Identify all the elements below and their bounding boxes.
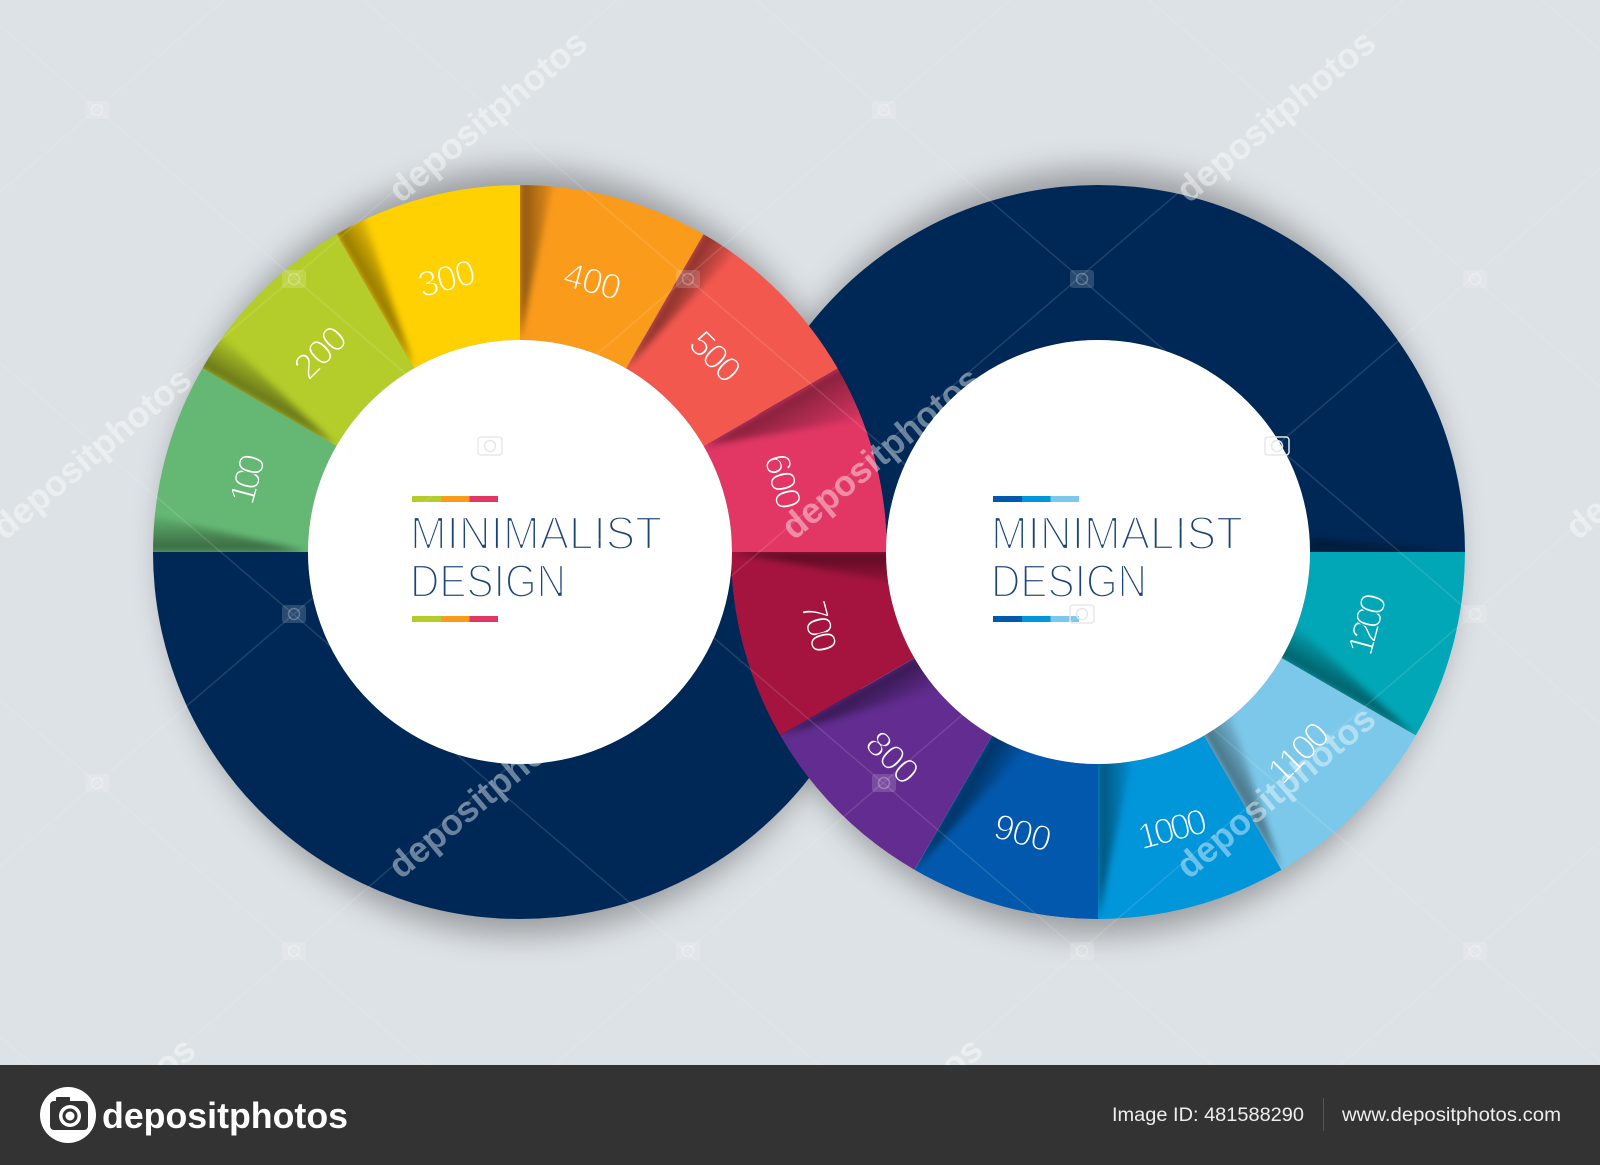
right ring numbers: 800 (858, 722, 928, 792)
segment 1100 (1204, 658, 1416, 870)
right ring numbers: 1000 (1133, 800, 1211, 858)
segment 700 (731, 552, 914, 736)
left ring navy half (153, 552, 887, 919)
left centre label: MINIMALIST (410, 507, 662, 559)
website: www.depositphotos.com (1341, 1104, 1561, 1126)
right centre label: MINIMALIST (991, 507, 1243, 559)
right ring navy half (731, 185, 1465, 552)
right ring numbers: 1200 (1339, 589, 1395, 659)
left ring numbers: 300 (413, 251, 480, 305)
segment 900 (914, 736, 1098, 919)
watermark layer: depositphotos (773, 358, 988, 547)
icon: depositphotos camera logo (40, 1087, 96, 1143)
left centre label: DESIGN (410, 555, 566, 607)
left ring numbers (221, 251, 810, 514)
right ring numbers: 1100 (1259, 713, 1338, 792)
left inner white circle (308, 340, 732, 764)
watermark layer: depositphotos (380, 697, 595, 886)
segment 600 (704, 368, 886, 552)
watermark layer: depositphotos (380, 21, 595, 210)
right centre label (991, 496, 1243, 622)
left ring numbers: 200 (285, 317, 355, 387)
logo wordmark: depositphotos (102, 1095, 348, 1136)
panel: right ring coloured segments (732, 552, 1465, 919)
segment 100 (145, 368, 336, 552)
image id: Image ID: 481588290 (1112, 1104, 1304, 1126)
left ring numbers: 600 (756, 449, 810, 514)
segment 1000 (1098, 736, 1282, 919)
segment 200 (202, 234, 414, 446)
segment 500 (626, 234, 838, 446)
segment 1200 (1282, 552, 1465, 736)
left ring numbers: 400 (559, 254, 626, 308)
right ring numbers: 900 (989, 805, 1056, 860)
left ring numbers: 500 (681, 322, 750, 391)
right ring numbers: 700 (793, 596, 846, 657)
drop shadow: right ring (740, 169, 1456, 935)
right ring numbers (793, 589, 1395, 860)
panel: left ring coloured segments (153, 185, 886, 552)
footer bar (0, 1065, 1600, 1165)
segment 400 (520, 177, 704, 368)
left centre label (410, 496, 662, 622)
drop shadow: left ring (162, 169, 878, 935)
right centre label: DESIGN (991, 555, 1147, 607)
left ring numbers: 100 (221, 449, 273, 508)
right inner white circle (886, 340, 1310, 764)
watermark layer: depositphotos (1168, 21, 1383, 210)
segment 800 (780, 658, 992, 870)
segment 300 (336, 185, 520, 368)
watermark layer: depositphotos (1168, 697, 1383, 886)
